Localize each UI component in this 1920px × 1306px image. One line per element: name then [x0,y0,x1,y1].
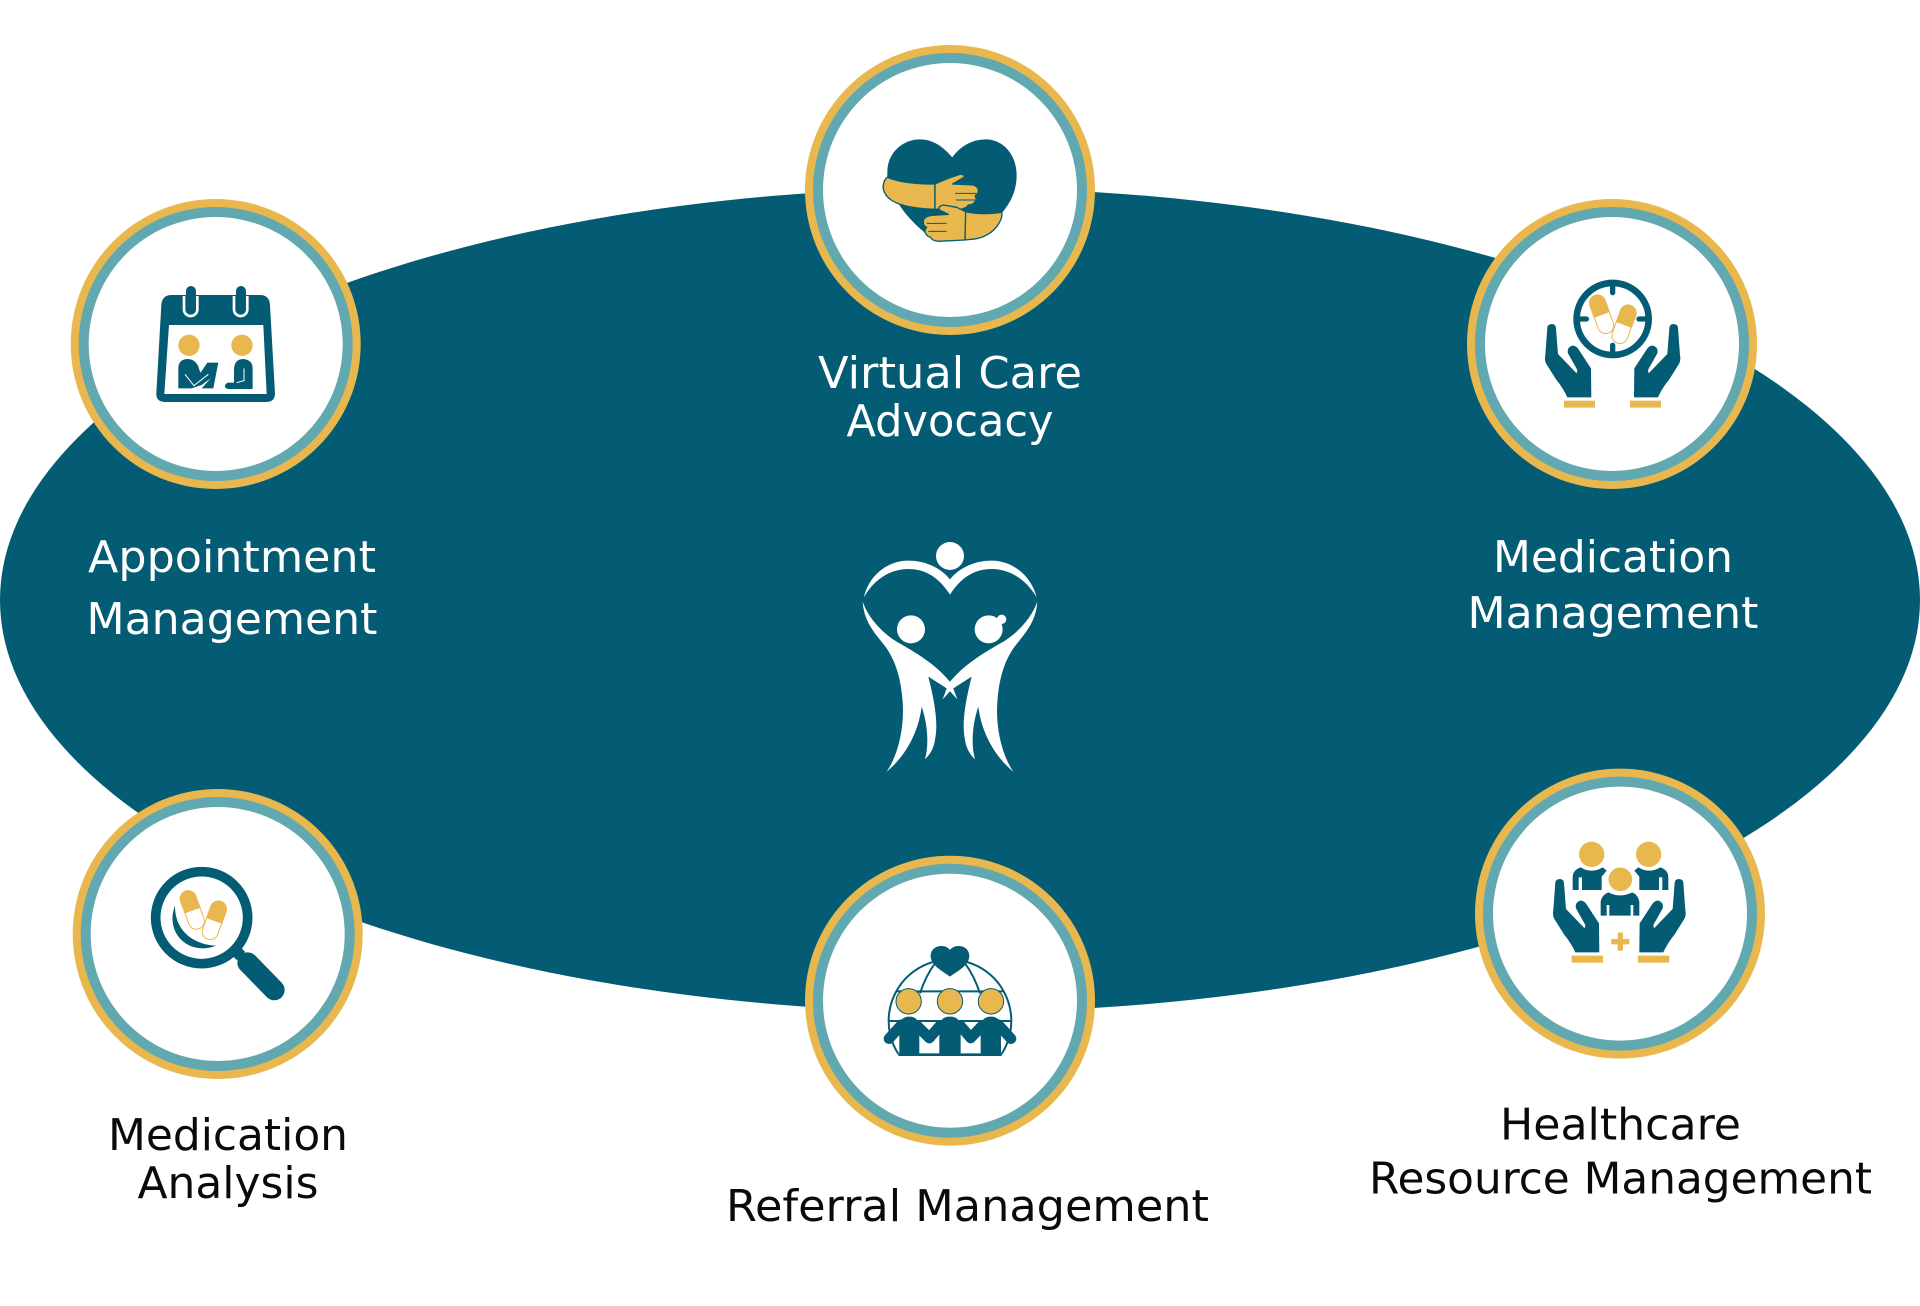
ring [805,856,1095,1146]
label [1369,1100,1872,1204]
label: Analysis [138,1158,318,1209]
label: Referral Management [726,1181,1209,1232]
node: Healthcare Resource Management [1369,769,1872,1204]
node: Virtual Care Advocacy [805,45,1095,447]
icon: hands holding pills [1545,283,1680,408]
center logo [863,542,1037,772]
node: Medication Analysis [73,789,363,1209]
icon: heart hug [883,139,1017,241]
label [108,1110,348,1209]
label: Advocacy [846,396,1054,447]
ring [71,199,361,489]
background ellipse [0,188,1920,1012]
label: Management [86,594,378,645]
label: Healthcare [1500,1100,1741,1150]
label [1468,532,1758,639]
node: Medication Management [1467,199,1758,639]
ring [73,789,363,1079]
icon: globe with people and heart [889,946,1011,1056]
node: Appointment Management [71,199,377,645]
label [86,532,378,645]
label: Management [1468,588,1758,639]
ring [1467,199,1757,489]
ring [1475,769,1765,1059]
label: Medication [108,1110,348,1161]
node: Referral Management [726,856,1209,1232]
label: Resource Management [1369,1154,1872,1204]
icon: hands holding family [1553,842,1686,963]
icon: magnifier with pills [156,872,274,990]
label: Medication [1493,532,1733,583]
label: Appointment [88,532,376,583]
ring [805,45,1095,335]
icon: calendar with people [156,286,275,402]
label: Virtual Care [818,348,1082,399]
label [818,348,1082,447]
